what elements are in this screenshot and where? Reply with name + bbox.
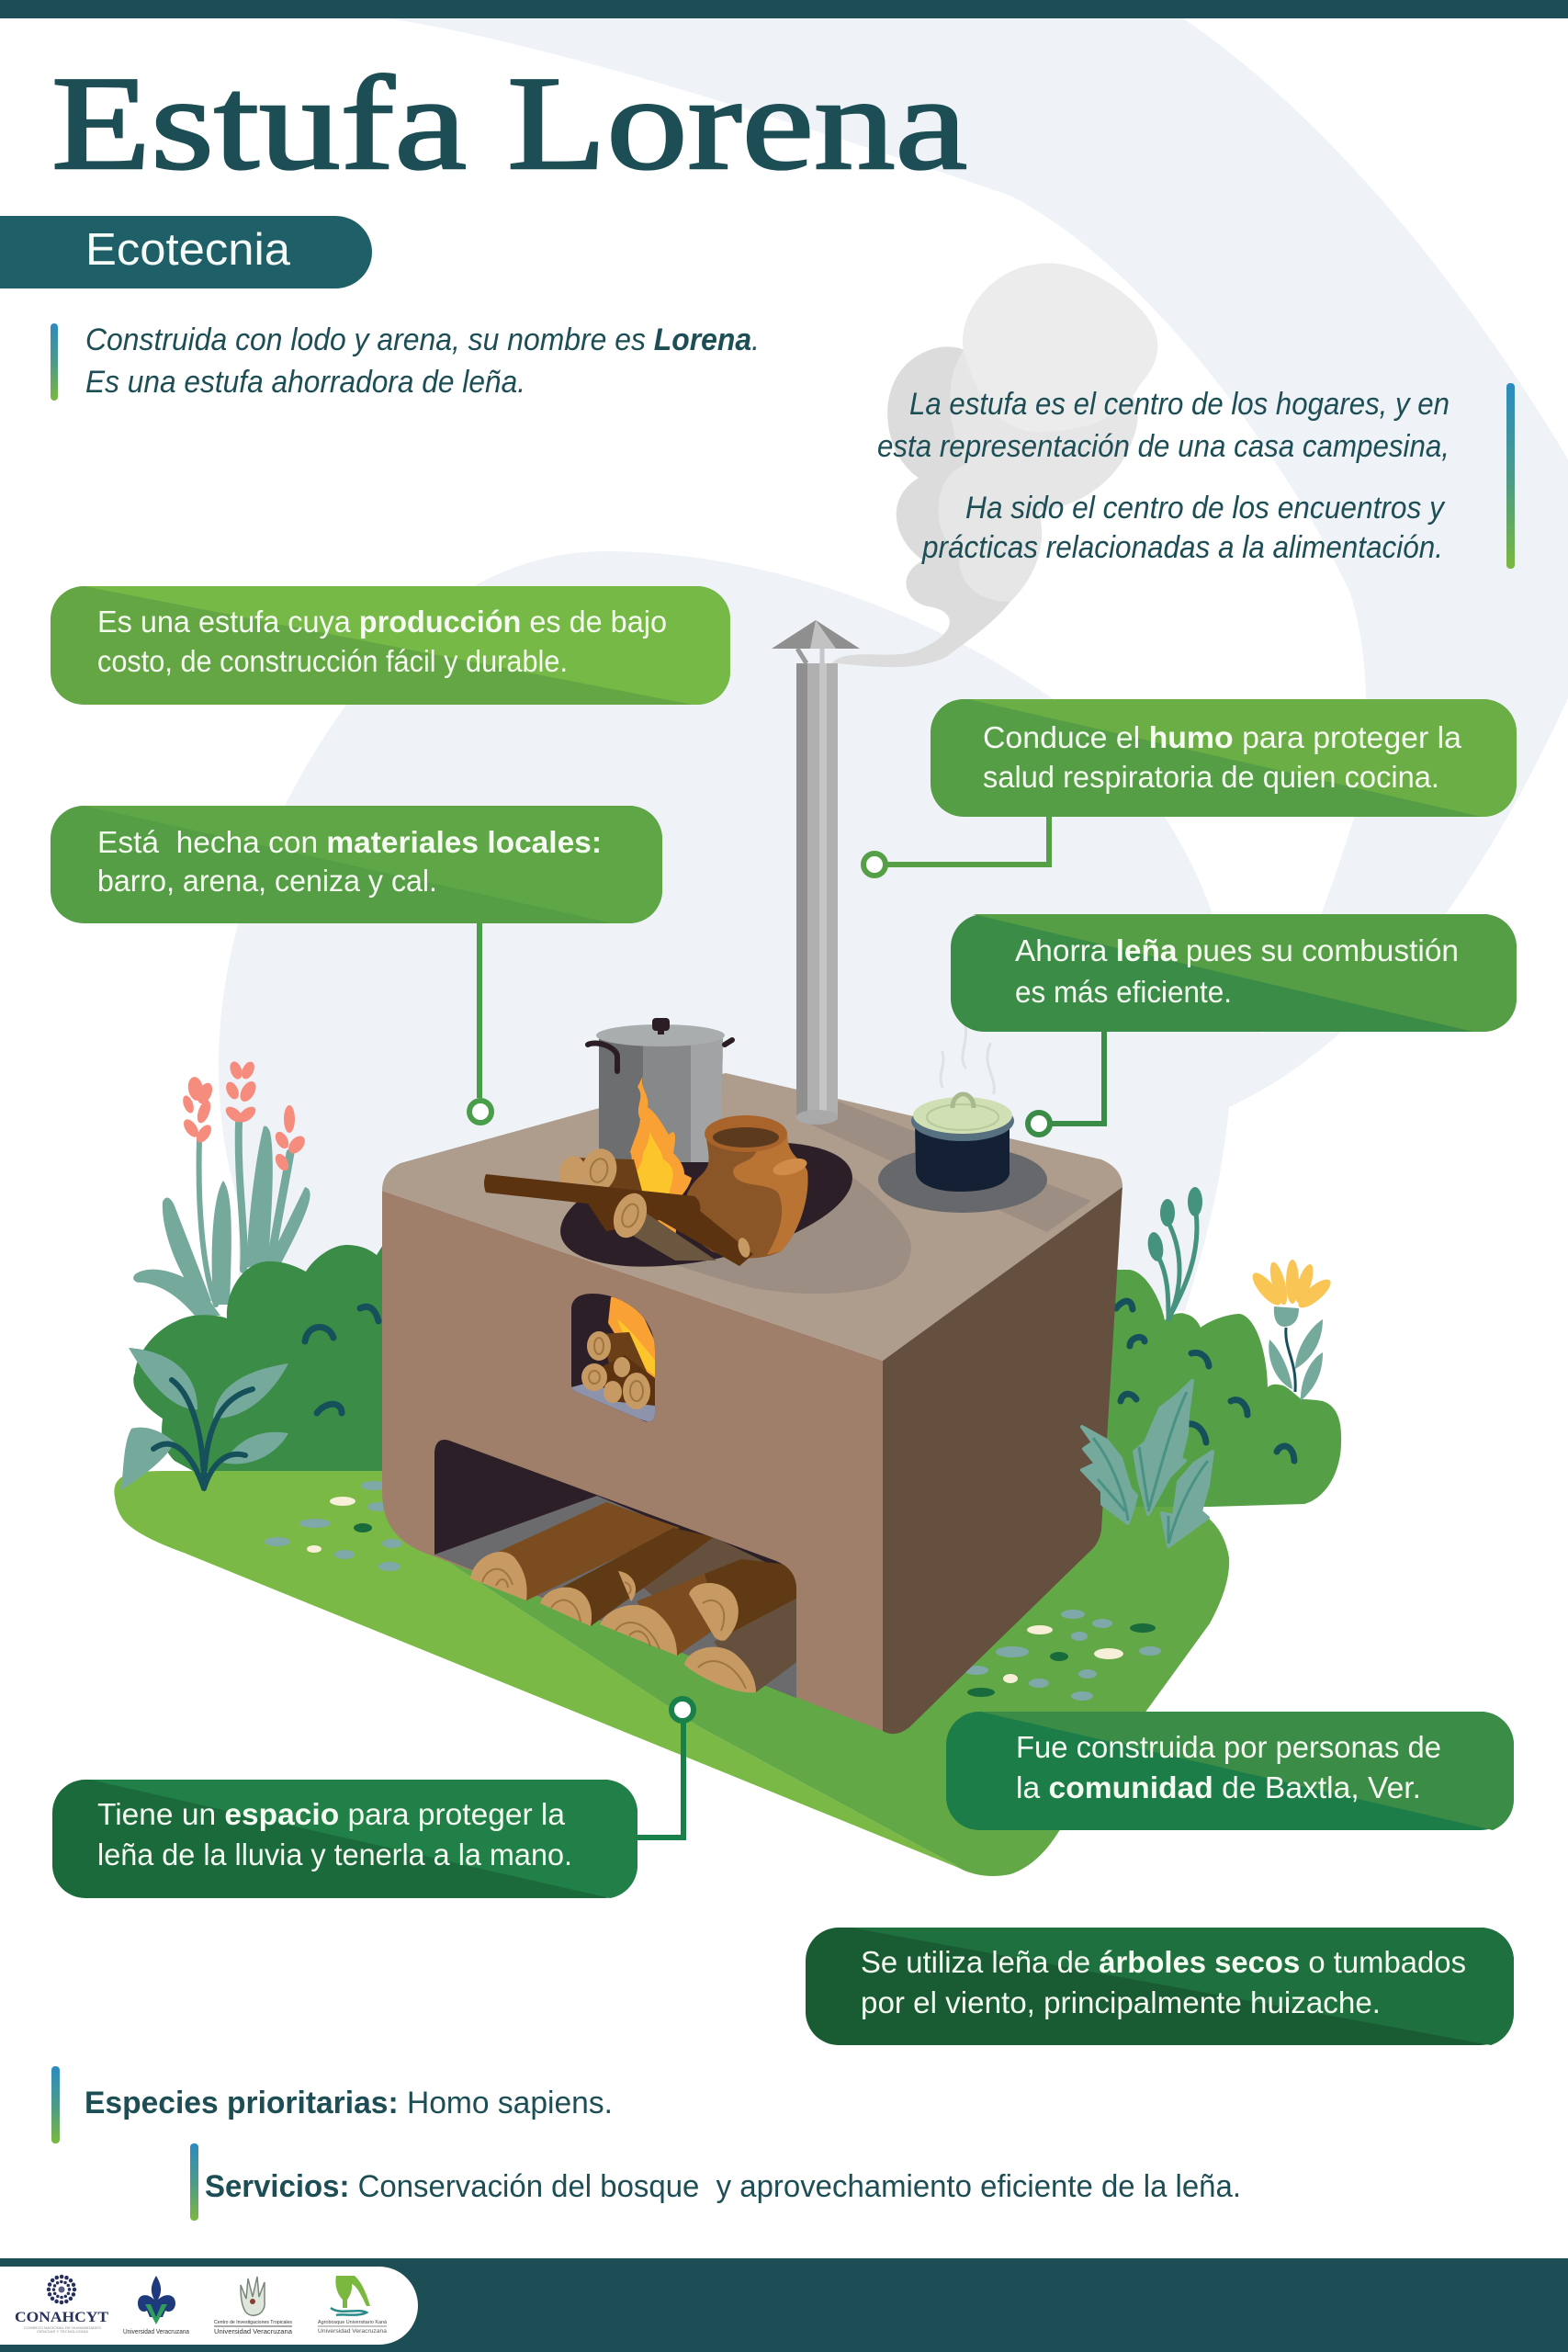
ecotecnia pill — [0, 216, 372, 288]
callout: comunidad: Fue construida por personas de — [1016, 1730, 1441, 1764]
logo: Universidad Veracruzana — [123, 2276, 189, 2335]
callout: árboles secos — [806, 1928, 1514, 2045]
callout: materiales locales — [51, 806, 662, 923]
firewood storage opening — [432, 1433, 799, 1704]
aloe plant with pink flowers — [133, 1059, 310, 1316]
connector: leña — [1028, 1032, 1104, 1135]
ecotecnia pill: Ecotecnia — [85, 225, 291, 275]
logo: CONAHCYT: CONSEJO NACIONAL DE HUMANIDADES — [24, 2326, 102, 2330]
flame — [628, 1076, 692, 1240]
cooking hole — [549, 1120, 863, 1289]
connector: materiales locales — [469, 923, 491, 1123]
small blue pot with steam — [878, 1022, 1047, 1213]
fern leaves — [1082, 1381, 1213, 1546]
stove left face — [382, 1191, 883, 1731]
right text block: esta representación de una casa campesina, — [877, 429, 1450, 464]
background swirl — [0, 18, 1568, 1314]
callout: humo — [931, 699, 1517, 817]
callout: producción: costo, de construcción fácil y durable. — [97, 644, 568, 678]
right text block: La estufa es el centro de los hogares, y en — [909, 387, 1450, 422]
large aluminium pot — [588, 1018, 732, 1162]
stove right face — [883, 1185, 1122, 1734]
species text: Especies prioritarias: Homo sapiens. — [85, 2086, 613, 2120]
yellow flower — [1248, 1260, 1335, 1401]
services text: Servicios: Conservación del bosque y aprovechamiento eficiente de la leña. — [205, 2169, 1241, 2204]
intro text block: Construida con lodo y arena, su nombre es Lorena. — [85, 322, 760, 357]
logo: Agrobosque Universitario Kaná: Universidad Veracruzana — [318, 2329, 388, 2335]
logo: CONAHCYT: CONAHCYT — [15, 2310, 108, 2325]
callout: comunidad — [946, 1712, 1514, 1830]
left bush — [133, 1240, 386, 1471]
intro text block — [51, 322, 760, 401]
front leafy plant — [121, 1348, 288, 1490]
logo: Universidad Veracruzana: Universidad Veracruzana — [123, 2329, 189, 2335]
logo: Agrobosque Universitario Kaná — [318, 2276, 388, 2335]
species text — [51, 2066, 613, 2143]
hole shadow — [659, 1178, 911, 1294]
chimney shadow on top — [803, 1102, 1091, 1232]
callout: producción — [51, 586, 730, 705]
callout: árboles secos: Se utiliza leña de árboles secos o tumbados — [861, 1945, 1466, 1979]
callout: árboles secos: por el viento, principalmente huizache. — [861, 1985, 1381, 2019]
small fire opening — [570, 1291, 657, 1424]
clay jar — [683, 1115, 808, 1259]
chimney — [772, 620, 860, 1125]
right pebbles — [964, 1610, 1161, 1701]
title: Estufa Lorena — [51, 49, 967, 198]
callout: materiales locales: Está hecha con materiales locales: — [97, 825, 602, 859]
top bar — [0, 0, 1568, 18]
callout: espacio: Tiene un espacio para proteger la — [97, 1797, 566, 1831]
callout: espacio: leña de la lluvia y tenerla a la mano. — [97, 1838, 572, 1871]
services text — [190, 2143, 1241, 2221]
ground — [114, 1378, 1229, 1876]
footer logo panel — [0, 2267, 418, 2345]
stove body — [382, 1073, 1122, 1734]
left pebbles — [265, 1481, 402, 1571]
logo: Centro de Investigaciones Tropicales — [214, 2277, 292, 2335]
smoke from chimney — [831, 264, 1157, 667]
callout: leña — [951, 914, 1517, 1032]
right text block: prácticas relacionadas a la alimentación. — [921, 530, 1443, 565]
stacked firewood — [470, 1502, 799, 1692]
callout: espacio — [52, 1780, 637, 1898]
logo: CONAHCYT: CIENCIAS Y TECNOLOGÍAS — [37, 2330, 89, 2334]
callout: comunidad: la comunidad de Baxtla, Ver. — [1016, 1770, 1421, 1804]
callout: leña: Ahorra leña pues su combustión — [1015, 933, 1459, 967]
callout: humo: Conduce el humo para proteger la — [983, 720, 1462, 754]
footer bar — [0, 2258, 1568, 2352]
connector: humo — [863, 817, 1049, 876]
intro text block: Es una estufa ahorradora de leña. — [85, 365, 525, 400]
callout: materiales locales: barro, arena, ceniza y cal. — [97, 864, 437, 898]
logo: Centro de Investigaciones Tropicales: Centro de Investigaciones Tropicales — [214, 2320, 292, 2325]
logo: Agrobosque Universitario Kaná: Agrobosque Universitario Kaná — [318, 2320, 387, 2325]
logo: Centro de Investigaciones Tropicales: Universidad Veracruzana — [214, 2329, 292, 2335]
right bush — [1093, 1270, 1341, 1507]
firewood on the stove — [484, 1145, 753, 1266]
callout: leña: es más eficiente. — [1015, 975, 1232, 1009]
connector: espacio — [637, 1699, 694, 1838]
logo: CONAHCYT — [15, 2277, 108, 2334]
right text block: Ha sido el centro de los encuentros y — [965, 491, 1446, 526]
right text block — [877, 383, 1515, 569]
callout: producción: Es una estufa cuya producción es de bajo — [97, 605, 667, 639]
callout: humo: salud respiratoria de quien cocina. — [983, 760, 1439, 794]
stove top — [382, 1073, 1122, 1361]
reed plant — [1145, 1187, 1202, 1319]
